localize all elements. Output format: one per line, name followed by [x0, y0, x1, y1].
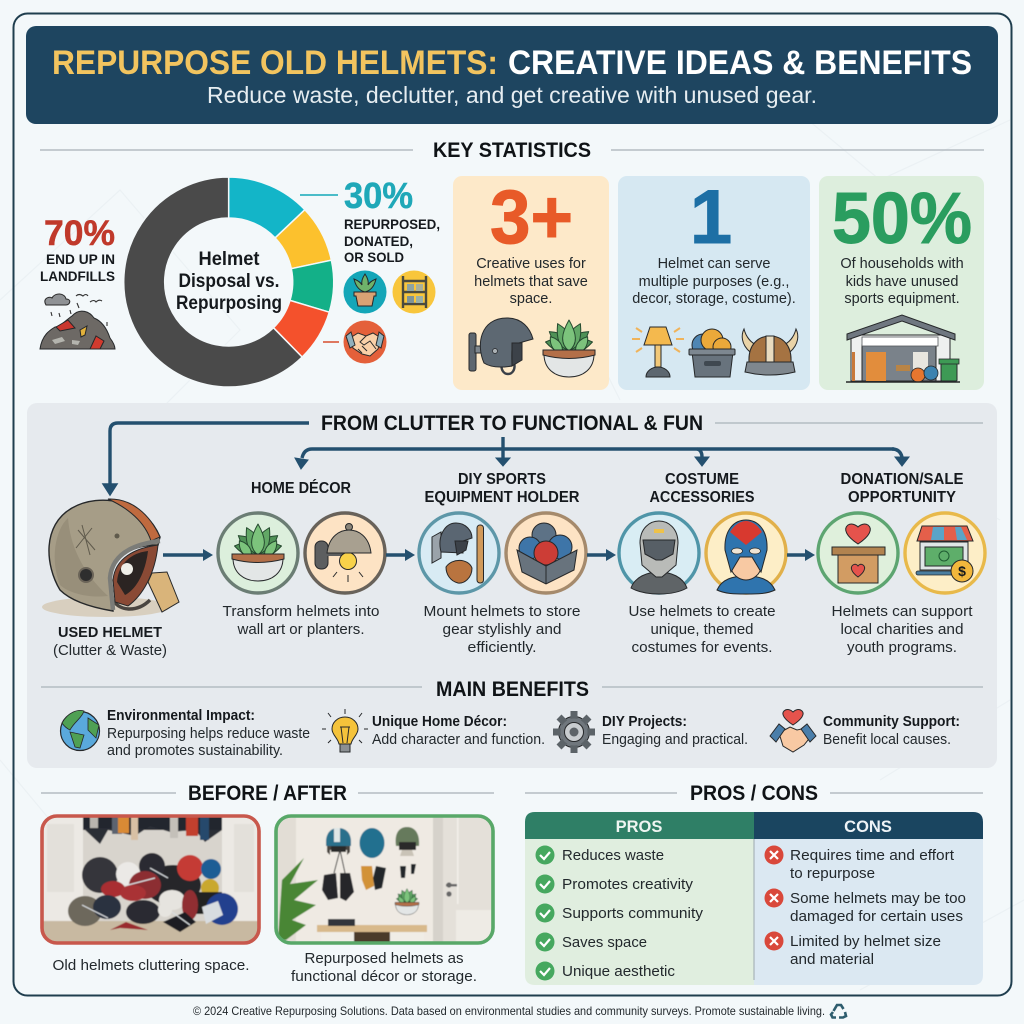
label: used helmet: (Clutter & Waste) [53, 643, 167, 659]
icon: globe [60, 710, 100, 750]
benefit text [107, 708, 310, 759]
icon: heart and handshake [770, 709, 816, 752]
stat card: 3+ creative uses: Creative uses for [476, 256, 586, 272]
pros list: Saves space [562, 934, 647, 951]
step: costume accessories [619, 471, 786, 656]
description: efficiently. [468, 639, 536, 656]
caption: after: Repurposed helmets as [304, 951, 464, 967]
callout: 70 percent landfills: END UP IN [46, 252, 115, 267]
icon: viking helmet [742, 329, 798, 375]
stat card: 50 percent of households [819, 176, 984, 390]
benefit: DIY projects [553, 711, 748, 753]
callout: 70 percent landfills [40, 214, 115, 349]
stat card: 1 helmet many purposes: 1 [690, 175, 732, 260]
cons header: CONS [844, 818, 892, 836]
section heading: key statistics: KEY STATISTICS [433, 139, 591, 162]
cons list: and material [790, 951, 874, 968]
header banner [26, 26, 998, 124]
callout: 30 percent repurposed: OR SOLD [344, 249, 404, 265]
step: DIY sports equipment holder [419, 471, 586, 656]
photo: cluttered closet (before) [42, 816, 259, 943]
description: costumes for events. [632, 639, 772, 656]
callout: 30 percent repurposed [300, 175, 440, 364]
stat card: 3+ creative uses: space. [510, 291, 552, 307]
icon: shelf badge [392, 270, 436, 314]
icon: landfill [40, 294, 115, 349]
label: used helmet: USED HELMET [58, 625, 162, 641]
cons list: Requires time and effort [790, 847, 955, 864]
cons list: Limited by helmet size [790, 933, 941, 950]
stat card: 1 helmet many purposes: multiple purposes (e.g., [639, 274, 789, 290]
title [52, 44, 972, 82]
arrow: helmet to home decor [163, 549, 213, 561]
cons list: Some helmets may be too [790, 890, 966, 907]
donut centre label: Repurposing [176, 293, 282, 314]
callout: 30 percent repurposed: DONATED, [344, 233, 413, 249]
icon: light bulb [322, 709, 368, 752]
icon: storage bin [689, 329, 735, 377]
description [832, 603, 973, 656]
stat card: 50 percent of households: Of households with [840, 256, 964, 272]
pros list: Unique aesthetic [562, 963, 675, 980]
benefit: unique home decor [322, 709, 545, 752]
step: DIY sports equipment holder: EQUIPMENT HOLDER [424, 489, 580, 506]
subtitle: Reduce waste, declutter, and get creative with unused gear. [207, 82, 817, 108]
description: Helmets can support [832, 603, 973, 620]
callout: 70 percent landfills: 70% [44, 214, 115, 253]
donut centre label: Helmet [198, 249, 260, 270]
stat card: 50 percent of households: sports equipment. [844, 291, 960, 307]
arrow: decor to holder [386, 549, 415, 561]
benefit text: DIY Projects: [602, 714, 687, 730]
donut centre label: Disposal vs. [178, 271, 280, 292]
pros and cons table [525, 812, 983, 985]
step: donation or sale opportunity [818, 471, 985, 656]
cons header [754, 812, 983, 839]
icon: planter badge [344, 270, 386, 314]
icon: storage bin circle [506, 513, 586, 593]
description: Transform helmets into [222, 603, 380, 620]
icon: online shop circle: $ [958, 563, 966, 579]
stat card: 3+ creative uses: helmets that save [474, 274, 588, 290]
benefit text [372, 714, 545, 748]
icon: helmet, bat and glove circle [419, 513, 499, 593]
section heading: flow: FROM CLUTTER TO FUNCTIONAL & FUN [321, 412, 703, 435]
description: local charities and [840, 621, 964, 638]
pros list: Promotes creativity [562, 876, 694, 893]
description: gear stylishly and [442, 621, 562, 638]
step: costume accessories: ACCESSORIES [650, 489, 754, 506]
callout: 70 percent landfills: LANDFILLS [40, 269, 115, 284]
stat card: 1 helmet many purposes [618, 175, 810, 390]
benefit text [602, 714, 748, 748]
pros list: Supports community [562, 905, 704, 922]
caption: after [291, 951, 477, 985]
pros list [536, 846, 704, 980]
benefit text: and promotes sustainability. [107, 742, 283, 759]
icon: recycle [831, 1005, 846, 1018]
cons list: to repurpose [790, 865, 875, 882]
description [222, 603, 380, 638]
benefit text: Repurposing helps reduce waste [107, 725, 310, 742]
cons list [764, 846, 966, 968]
benefit: community support [770, 709, 960, 752]
arrow: costume to donation [787, 549, 815, 561]
arrows: branching to four uses [295, 437, 909, 469]
description: Mount helmets to store [424, 603, 580, 620]
section heading: pros and cons: PROS / CONS [690, 782, 818, 805]
icon: used helmet [42, 499, 179, 617]
stat card: 1 helmet many purposes: Helmet can serve [658, 256, 770, 272]
title: CREATIVE IDEAS & BENEFITS [508, 44, 972, 82]
stat card: 3+ creative uses [453, 175, 609, 390]
photo: repurposed helmets on wall (after) [276, 816, 493, 943]
icon: helmet planter [543, 320, 595, 377]
icon: garage [846, 315, 960, 382]
description [424, 603, 580, 656]
icon: superhero mask circle [706, 513, 786, 594]
caption: before: Old helmets cluttering space. [52, 958, 250, 974]
donut chart: helmet disposal vs repurposing [124, 177, 334, 387]
title: REPURPOSE OLD HELMETS: [52, 44, 498, 82]
benefit: environmental impact [60, 708, 310, 759]
step: donation or sale opportunity: OPPORTUNITY [848, 489, 957, 506]
description: unique, themed [650, 621, 754, 638]
label: used helmet [53, 625, 167, 659]
stat card: 50 percent of households: kids have unused [846, 274, 958, 290]
pros header: PROS [616, 818, 662, 836]
icon: armoured helmet circle [619, 513, 699, 594]
description: wall art or planters. [236, 621, 364, 638]
step: donation or sale opportunity: DONATION/SALE [840, 471, 964, 488]
icon: lamp [632, 327, 684, 377]
donut centre label [176, 249, 282, 314]
step: costume accessories: COSTUME [665, 471, 739, 488]
icon: wall lamp circle [305, 513, 385, 593]
icon: gear [553, 711, 595, 753]
panel: from clutter to functional and fun [27, 403, 997, 768]
icon: planter circle [218, 513, 298, 593]
description: youth programs. [847, 639, 957, 656]
section heading: before and after: BEFORE / AFTER [188, 782, 347, 805]
callout: 30 percent repurposed: 30% [344, 175, 413, 216]
benefit text: Add character and function. [372, 731, 545, 748]
icon: online shop circle [905, 513, 985, 593]
icon: handshake badge [323, 320, 386, 364]
pros list: Reduces waste [562, 847, 664, 864]
benefit text: Benefit local causes. [823, 731, 951, 748]
benefit text [823, 714, 960, 748]
step: home decor [218, 480, 385, 638]
benefit text: Engaging and practical. [602, 731, 748, 748]
cons list: damaged for certain uses [790, 908, 963, 925]
arrow: to used helmet [103, 423, 309, 495]
step: home decor: HOME DÉCOR [251, 480, 351, 497]
callout: 30 percent repurposed: REPURPOSED, [344, 216, 440, 232]
benefit text: Unique Home Décor: [372, 714, 507, 730]
pros header [525, 812, 754, 839]
benefit text: Community Support: [823, 714, 960, 730]
benefit text: Environmental Impact: [107, 708, 255, 724]
stat card: 50 percent of households: 50% [832, 179, 972, 259]
icon: wall-mounted helmet [469, 318, 533, 374]
description [628, 603, 776, 656]
arrow: holder to costume [587, 549, 616, 561]
step: DIY sports equipment holder: DIY SPORTS [458, 471, 546, 488]
caption: after: functional décor or storage. [291, 969, 477, 985]
footer: © 2024 Creative Repurposing Solutions. Data based on environmental studies and community surveys. Promote sustainable living. [193, 1004, 825, 1018]
description: Use helmets to create [628, 603, 776, 620]
stat card: 1 helmet many purposes: decor, storage, costume). [632, 291, 796, 307]
stat card: 3+ creative uses: 3+ [490, 175, 573, 260]
section heading: main benefits: MAIN BENEFITS [436, 678, 589, 701]
icon: donation box circle [818, 513, 898, 593]
